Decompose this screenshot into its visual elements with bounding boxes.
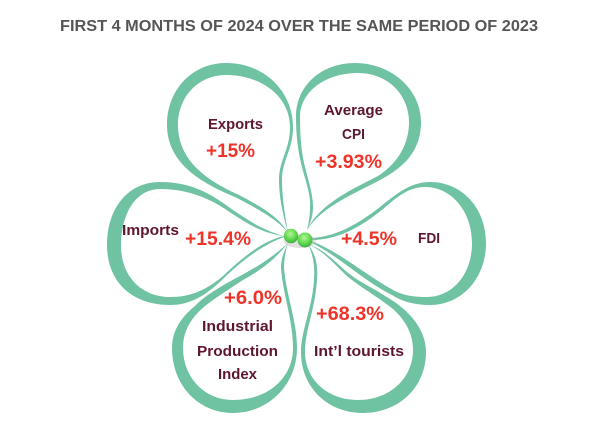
petal: average CPI [296, 63, 421, 230]
value: imports: +15.4% [185, 228, 251, 250]
petal: exports [167, 63, 293, 233]
label: FDI: FDI [418, 230, 440, 247]
petal shape: average CPI [296, 63, 421, 230]
label: industrial production index: Industrial [202, 318, 273, 335]
label: imports: Imports [122, 222, 179, 239]
petal shape: international tourists [301, 244, 426, 413]
label: exports: Exports [208, 116, 263, 133]
value: FDI: +4.5% [341, 228, 397, 250]
petal shape: exports [167, 63, 293, 233]
value: exports: +15% [206, 140, 255, 162]
petal shape: FDI [308, 182, 486, 305]
label: average CPI: Average [324, 102, 383, 119]
bead: right [298, 232, 312, 248]
label: industrial production index: Production [197, 343, 278, 360]
value: average CPI: +3.93% [315, 151, 382, 173]
petal shape: industrial production index [172, 243, 297, 413]
title: FIRST 4 MONTHS OF 2024 OVER THE SAME PERIOD OF 2023 [60, 18, 538, 35]
bead: left [284, 229, 298, 243]
bead shadow [284, 234, 316, 248]
petal: FDI [308, 182, 486, 305]
value: international tourists: +68.3% [316, 303, 384, 325]
label: international tourists: Int’l tourists [314, 343, 404, 360]
label: average CPI [324, 102, 383, 143]
petal: imports [107, 182, 284, 305]
petal: industrial production index [172, 243, 297, 413]
petal shape: imports [107, 182, 284, 305]
label: industrial production index: Index [218, 366, 258, 383]
center beads [284, 229, 316, 248]
label: average CPI: CPI [342, 126, 365, 143]
value: industrial production index: +6.0% [224, 287, 282, 309]
label: industrial production index [197, 318, 278, 383]
petal: international tourists [301, 244, 426, 413]
